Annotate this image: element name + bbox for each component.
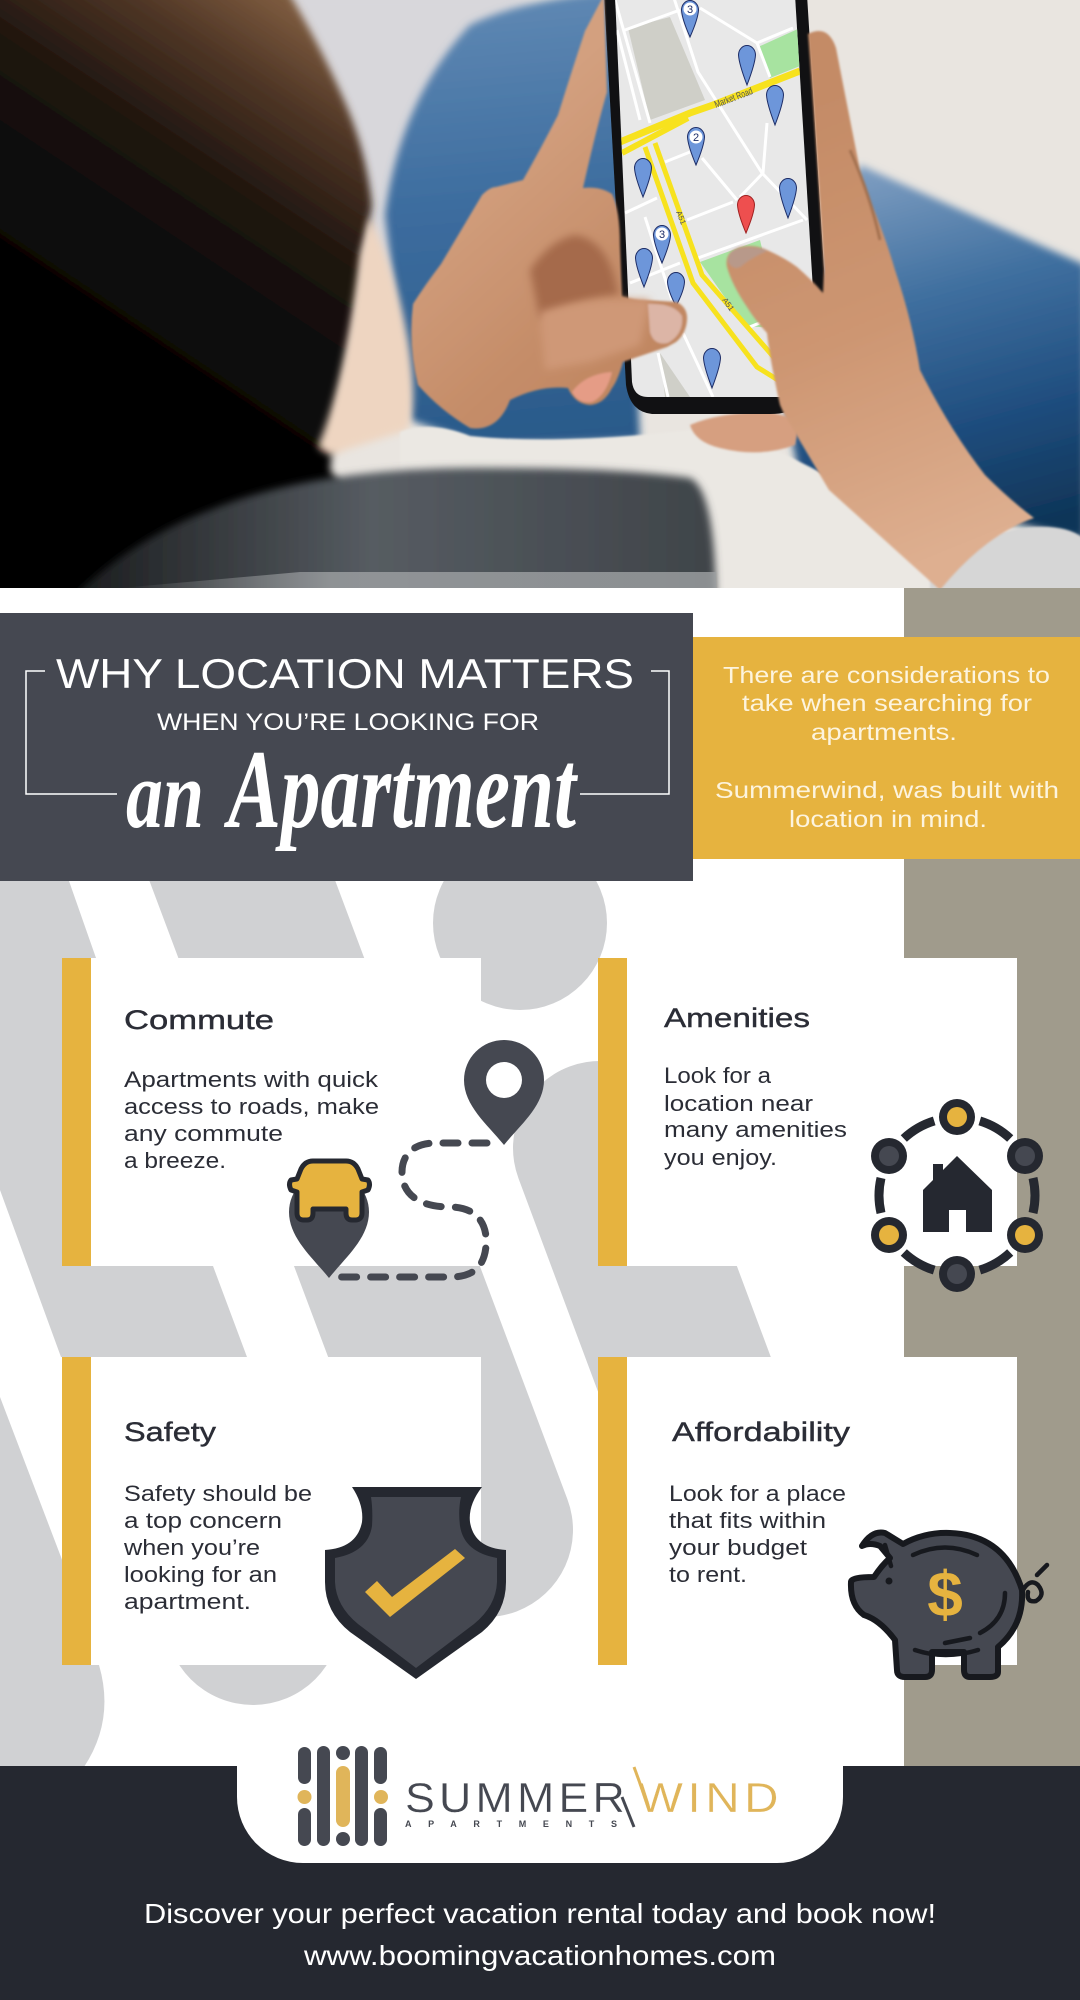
photo right hand xyxy=(727,31,1034,590)
logo R tail xyxy=(622,1797,634,1827)
taupe column xyxy=(904,588,1080,1768)
amenities heading: Amenities xyxy=(664,1003,810,1033)
map number badge 3 lower xyxy=(656,228,668,241)
photo pillow xyxy=(70,468,716,600)
logo wordmark wind: WIND xyxy=(638,1774,783,1821)
map road label: Market Road xyxy=(713,86,754,111)
panel: affordability xyxy=(598,1357,1017,1665)
panel: commute xyxy=(62,958,481,1266)
affordability text: to rent. xyxy=(669,1562,747,1587)
commute heading: Commute xyxy=(124,1005,274,1035)
map number badge 2: 2 xyxy=(693,132,699,144)
map road label A51 lower: A51 xyxy=(720,296,736,313)
hero photo: woman holding phone with map xyxy=(0,0,1080,600)
amenities text: location near xyxy=(664,1091,814,1116)
map pins xyxy=(634,0,796,388)
script heading: Apartment xyxy=(224,728,578,852)
photo hair xyxy=(0,0,378,588)
amenities text: you enjoy. xyxy=(664,1145,777,1170)
script heading xyxy=(126,728,578,852)
commute text: Apartments with quick xyxy=(124,1067,379,1092)
footer call to action xyxy=(144,1898,936,1971)
safety text xyxy=(123,1481,312,1614)
icon: safety shield xyxy=(325,1487,506,1679)
footer band xyxy=(0,1766,1080,2000)
panel: amenities xyxy=(598,958,1017,1266)
amenities text xyxy=(664,1063,847,1170)
panel: intro callout: Summerwind, was built with xyxy=(715,777,1059,803)
safety text: a top concern xyxy=(124,1508,282,1533)
panel: intro callout: There are considerations to xyxy=(723,662,1050,688)
script heading: an xyxy=(126,741,204,848)
affordability heading: Affordability xyxy=(672,1417,851,1447)
amenities text: many amenities xyxy=(664,1117,847,1142)
photo phone map screen xyxy=(615,0,812,397)
logo mark xyxy=(298,1746,388,1846)
safety text: apartment. xyxy=(124,1589,251,1614)
logo pill xyxy=(237,1700,843,1863)
panel: intro callout: take when searching for xyxy=(742,690,1032,716)
heading: why location matters: WHY LOCATION MATTERS xyxy=(56,650,634,697)
map number badge 3 lower: 3 xyxy=(659,229,665,241)
map number badge 3 top: 3 xyxy=(687,4,693,16)
photo sweater xyxy=(400,427,1080,600)
amenities text: Look for a xyxy=(664,1063,772,1088)
footer call to action: Discover your perfect vacation rental today and book now! xyxy=(144,1898,936,1929)
photo neck and ear xyxy=(318,217,413,454)
map road label A51: A51 xyxy=(674,209,688,226)
icon: commute route with pins and car xyxy=(289,1040,544,1278)
icon: piggy bank xyxy=(851,1533,1047,1677)
dollar sign: $ xyxy=(927,1558,963,1630)
photo finger behind phone xyxy=(690,412,800,452)
panel: safety xyxy=(62,1357,481,1665)
footer call to action: www.boomingvacationhomes.com xyxy=(303,1940,776,1971)
affordability text: that fits within xyxy=(669,1508,826,1533)
subheading: WHEN YOU’RE LOOKING FOR xyxy=(157,709,539,736)
logo apartments: APARTMENTS xyxy=(405,1819,617,1829)
photo jeans xyxy=(385,0,1080,540)
panel: title xyxy=(0,613,693,881)
logo W flourish xyxy=(634,1767,645,1797)
commute text: any commute xyxy=(124,1121,283,1146)
affordability text: Look for a place xyxy=(669,1481,846,1506)
affordability text: your budget xyxy=(669,1535,808,1560)
affordability text xyxy=(669,1481,846,1587)
map number badge 3 top xyxy=(684,2,696,16)
photo left hand xyxy=(411,0,687,428)
safety text: when you’re xyxy=(123,1535,260,1560)
logo: summerwind apartments xyxy=(298,1746,783,1846)
safety text: looking for an xyxy=(124,1562,277,1587)
panel: intro callout: apartments. xyxy=(811,719,957,745)
grey road pattern background xyxy=(0,800,735,1767)
photo backdrop wall and sofa xyxy=(290,0,1080,532)
logo wordmark summer: SUMMER xyxy=(405,1774,629,1821)
panel: intro callout xyxy=(693,637,1080,859)
commute text: a breeze. xyxy=(124,1148,226,1173)
commute text xyxy=(124,1067,379,1173)
panel: intro callout: location in mind. xyxy=(789,806,987,832)
commute text: access to roads, make xyxy=(124,1094,379,1119)
safety heading: Safety xyxy=(124,1417,217,1447)
map number badge 2 xyxy=(690,130,702,144)
icon: home with amenities ring xyxy=(871,1099,1043,1292)
safety text: Safety should be xyxy=(124,1481,312,1506)
photo phone body xyxy=(604,0,826,414)
